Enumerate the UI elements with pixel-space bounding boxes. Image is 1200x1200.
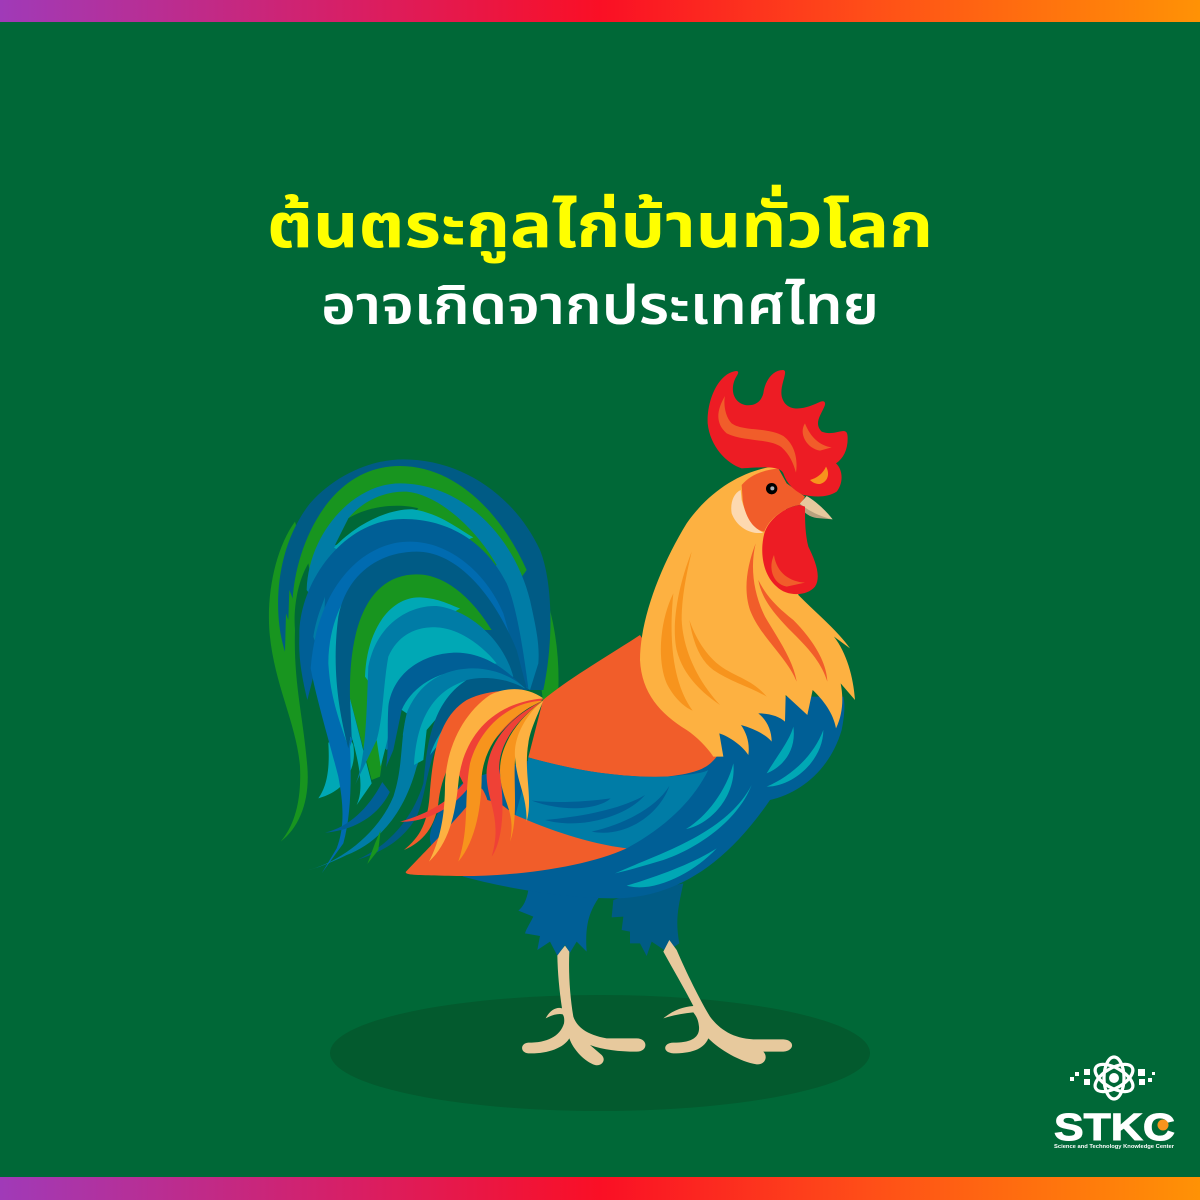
logo: STKC [1054, 1057, 1175, 1150]
eye [766, 483, 777, 494]
top gradient bar [0, 0, 1200, 22]
logo wordmark: STKC [1054, 1107, 1175, 1149]
ear patch [731, 490, 763, 533]
beak [800, 496, 833, 519]
head and neck [640, 370, 855, 757]
back leg feathers [612, 883, 683, 956]
rooster illustration [269, 370, 855, 1065]
ground shadow [330, 995, 870, 1111]
chest highlights [686, 763, 734, 829]
wattle [762, 505, 818, 594]
comb [708, 370, 848, 496]
neck hackles [640, 466, 855, 757]
saddle plumes [400, 689, 543, 862]
blue body [430, 697, 844, 898]
front leg feathers [518, 890, 600, 956]
hackle stripes [661, 593, 693, 711]
wing stripes [532, 798, 611, 808]
bottom gradient bar [0, 1177, 1200, 1200]
back leg and foot [663, 940, 792, 1064]
logo atom icon [1070, 1057, 1155, 1099]
tail feathers [269, 459, 559, 873]
subtitle: อาจเกิดจากประเทศไทย [321, 268, 879, 349]
front leg and foot [522, 946, 645, 1065]
lower orange wedge [406, 788, 627, 876]
orange back [528, 635, 717, 777]
logo tagline: Science and Technology Knowledge Center [1054, 1144, 1175, 1150]
lower teal feather [318, 717, 354, 798]
title [267, 181, 933, 349]
wing [515, 757, 708, 848]
title: ต้นตระกูลไก่บ้านทั่วโลก [267, 181, 933, 275]
face [742, 468, 805, 532]
logo orange dot [1158, 1120, 1168, 1130]
body [406, 635, 844, 1065]
